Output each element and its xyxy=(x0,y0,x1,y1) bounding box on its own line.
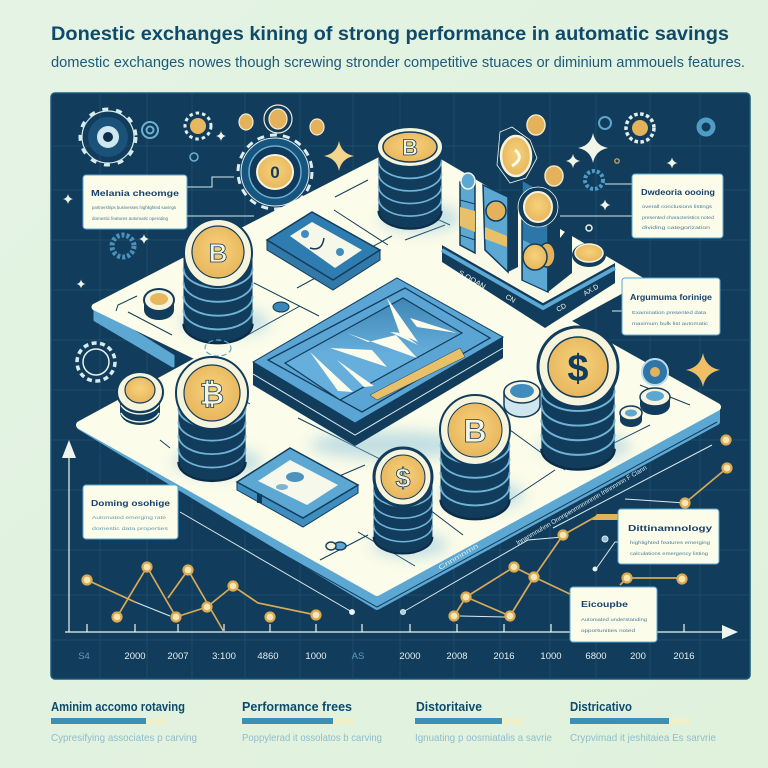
axis tick labels: 200 xyxy=(630,651,646,662)
sparkles right xyxy=(566,133,678,210)
coin stack: upper left xyxy=(184,219,252,343)
bar chart block xyxy=(442,115,615,328)
axis tick labels: 3:100 xyxy=(212,651,236,662)
axis tick labels: 2016 xyxy=(493,651,515,662)
ring small xyxy=(190,153,198,161)
big gear with gold coin xyxy=(238,135,312,209)
coin stack: dollar centre: $ xyxy=(395,463,411,493)
axis tick labels: 2000 xyxy=(399,651,421,662)
sparkle gold xyxy=(686,353,720,387)
line chart: right xyxy=(450,436,732,620)
card: bottom xyxy=(237,448,358,527)
tower 1 xyxy=(460,178,475,253)
callout: distinctive right xyxy=(618,509,719,564)
sparkle small xyxy=(216,131,226,141)
ring icon xyxy=(142,122,158,138)
sparkles left xyxy=(63,194,149,288)
legend item 3 xyxy=(415,700,552,744)
axis tick labels: 1000 xyxy=(305,651,327,662)
title: Donestic exchanges kining of strong performance in automatic savings xyxy=(51,24,729,45)
callout: distinctive right: Dittinamnology xyxy=(628,523,712,533)
callout: middle right: Examination presented data xyxy=(632,310,706,316)
coin stack: dollar large xyxy=(538,327,618,470)
callout: top left xyxy=(83,175,187,229)
small gear with coin xyxy=(185,113,211,139)
dashed ellipse xyxy=(205,340,231,356)
ring pile right of centre xyxy=(504,381,540,417)
subtitle: domestic exchanges nowes though screwing stronder competitive stuaces or diminium ammouels features. xyxy=(51,55,745,71)
axis tick labels: 4860 xyxy=(257,651,279,662)
callout: lower centre right: opportunities noted xyxy=(581,628,635,634)
legend item 2: Performance frees xyxy=(242,700,352,714)
big gear with gold coin: 0 xyxy=(270,163,280,182)
coin stack: dollar large: $ xyxy=(567,348,589,390)
gear right xyxy=(642,359,668,385)
callout: bottom left: Doming osohige xyxy=(91,498,170,508)
axis tick labels: 1000 xyxy=(540,651,562,662)
coin stack: dollar left xyxy=(176,357,248,481)
legend item 2: Poppylerad it ossolatos b carving xyxy=(242,732,382,744)
white zigzag chart line xyxy=(310,298,457,392)
callout: distinctive right: highlighted features emerging xyxy=(630,540,710,546)
floating gold coins xyxy=(239,105,324,135)
small blue coins on lower platform xyxy=(326,542,346,550)
callout: middle right: maximum bulk list automatic xyxy=(632,321,709,327)
blue pill xyxy=(273,302,289,312)
gear lower left xyxy=(77,343,115,381)
legend item 3: Distoritaive xyxy=(416,700,482,714)
callout: middle right xyxy=(622,278,720,335)
axis tick labels: 2016 xyxy=(673,651,695,662)
chart axes xyxy=(62,440,738,639)
yellow progress bar xyxy=(370,348,465,400)
gear top left xyxy=(80,109,136,165)
tower 3 xyxy=(522,180,548,292)
axis tick labels: 2000 xyxy=(124,651,146,662)
coin stack: top centre xyxy=(377,127,443,229)
callout: lower centre right: Eicoupbe xyxy=(581,599,628,609)
legend item 1 xyxy=(51,700,197,744)
axis tick labels xyxy=(78,651,695,662)
screen outer frame xyxy=(268,288,490,412)
coin stack: dollar left: ₿ xyxy=(200,378,224,411)
upper platform xyxy=(95,145,640,434)
axis tick labels: 6800 xyxy=(585,651,607,662)
callout: bottom left xyxy=(83,485,178,539)
small coin on upper platform xyxy=(144,289,174,320)
screen inner xyxy=(285,298,462,400)
callout: top right: Dwdeoria oooing xyxy=(641,187,715,197)
callout: top right: overall conclusions listings xyxy=(642,204,713,210)
callout: top right xyxy=(632,174,723,238)
legend item 4: Crypvimad it jeshitaiea Es sarvrie xyxy=(570,732,716,744)
axis tick labels: S4 xyxy=(78,651,90,662)
small gear left xyxy=(112,235,134,257)
callout: distinctive right: calculations emergency listing xyxy=(630,551,708,557)
callout: top right: presented characteristics noted xyxy=(642,215,714,221)
thin leader lines xyxy=(130,445,712,617)
platform edge labels xyxy=(437,464,649,572)
callout leader lines xyxy=(187,177,632,311)
platform edge labels: Cnnmnmn xyxy=(437,543,480,572)
coins right xyxy=(620,388,670,427)
coin stack: lower left xyxy=(117,372,163,425)
callout: top left: Melania cheomge xyxy=(91,188,179,198)
callout: top right: dividing categorization xyxy=(642,225,710,231)
panel: main dark illustration xyxy=(51,93,750,679)
screen base xyxy=(253,337,503,446)
sparkle large xyxy=(324,141,354,171)
lower platform xyxy=(80,240,717,607)
platform guide lines xyxy=(116,180,690,566)
screen deck xyxy=(253,278,503,423)
coin stack: upper left: B xyxy=(209,238,227,268)
coin stack: top centre: B xyxy=(402,135,418,160)
card: top xyxy=(267,212,380,290)
small coin on base xyxy=(572,243,606,267)
legend item 1: Cypresifying associates p carving xyxy=(51,732,197,744)
coin stack: bitcoin centre xyxy=(440,395,510,519)
line chart: left xyxy=(82,562,320,632)
legend item 2 xyxy=(242,700,382,744)
central screen xyxy=(253,278,503,446)
base labels: S QQAN xyxy=(457,270,486,291)
callout: bottom left: Automated emerging rate xyxy=(92,515,166,521)
platform edge labels: lnnanmnuhnn Onnnpenmnnnnnnn Inlnnnnnn F Clann xyxy=(515,464,649,547)
callout: lower centre right: Automated understanding xyxy=(581,617,647,623)
tower 2 xyxy=(483,185,508,272)
block base xyxy=(442,245,615,328)
coin stack: dollar centre xyxy=(374,448,432,554)
bar chart block: CN xyxy=(504,294,516,305)
callout: top left: domestic features automatic operating xyxy=(92,216,168,222)
axis tick labels: AS xyxy=(352,651,364,662)
coin stack: bitcoin centre: B xyxy=(463,413,487,449)
callout: middle right: Argumuma forinige xyxy=(630,292,712,302)
bar chart block: AX.D xyxy=(582,283,600,298)
tower coins xyxy=(461,115,563,270)
soft shadows under stacks xyxy=(174,204,631,557)
callout: bottom left: domestic data properties xyxy=(92,526,169,532)
callout: top left: partnerships businesses highlighted savings xyxy=(92,205,177,211)
legend item 4 xyxy=(570,700,716,744)
axis tick labels: 2008 xyxy=(446,651,468,662)
upper right gears and rings xyxy=(585,114,713,231)
callout: lower centre right xyxy=(570,587,657,642)
legend item 1: Aminim accomo rotaving xyxy=(51,700,185,714)
legend item 3: Ignuating p oosmiatalis a savrie xyxy=(415,732,552,744)
legend item 4: Districativo xyxy=(570,700,632,714)
axis tick labels: 2007 xyxy=(167,651,189,662)
bar chart block: CD xyxy=(556,303,568,314)
